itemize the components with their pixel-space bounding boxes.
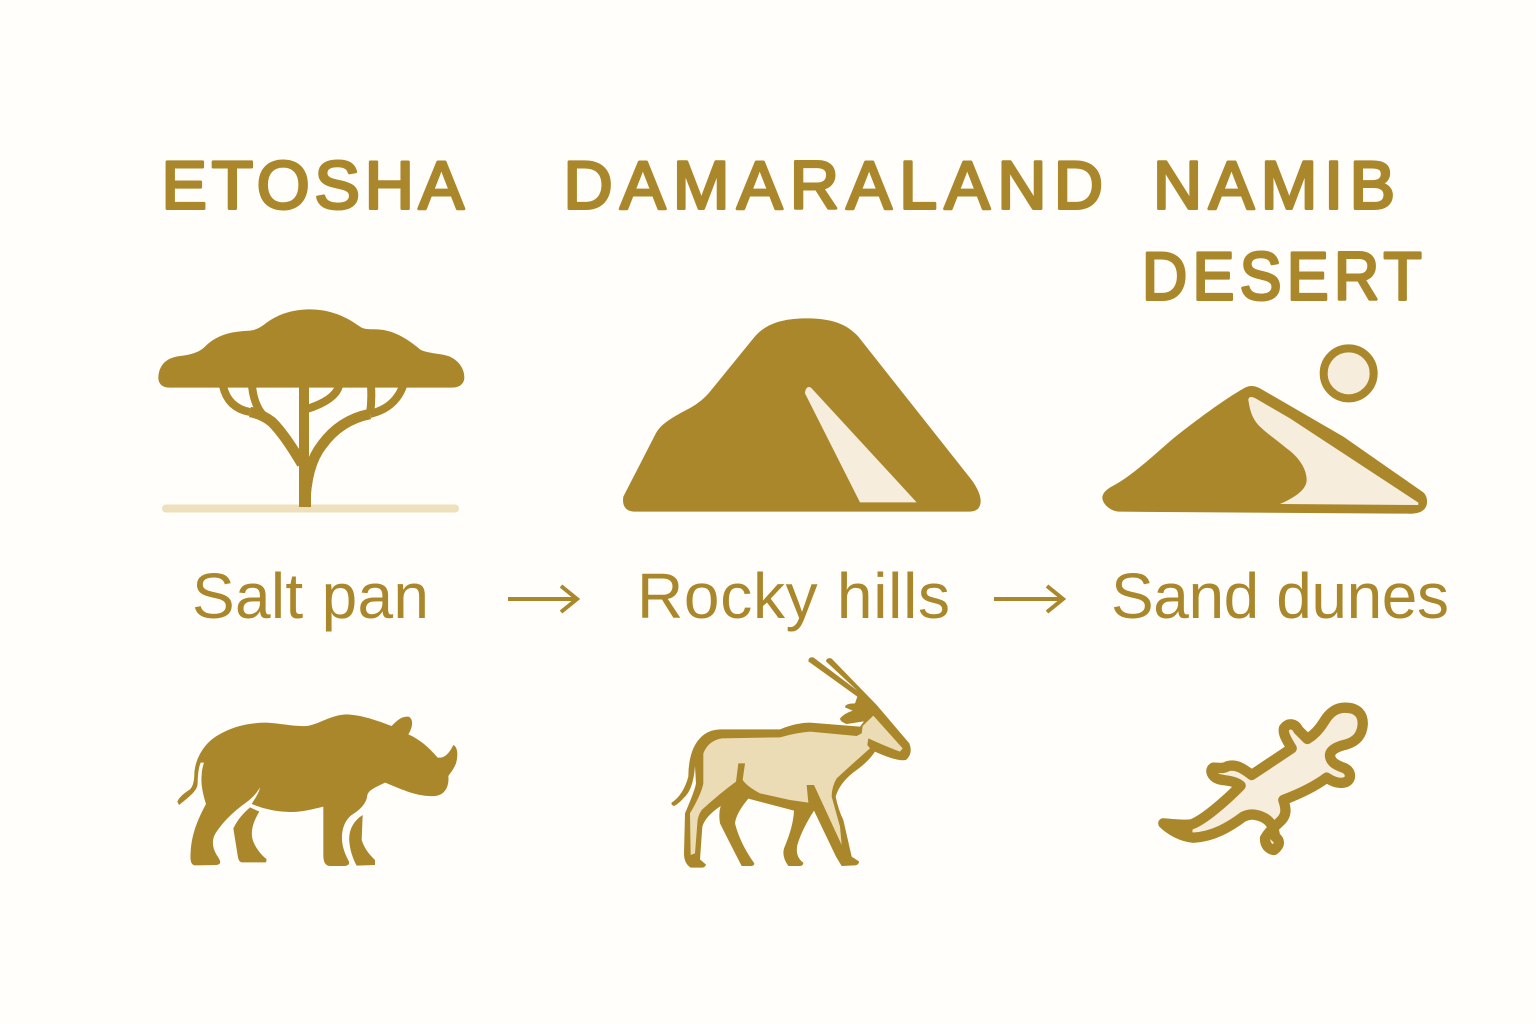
heading: Etosha: ETOSHA — [162, 148, 465, 224]
heading: Namib Desert — [1142, 148, 1422, 314]
icon: lizard — [1159, 708, 1363, 850]
icon: dune and sun — [1102, 348, 1427, 514]
panel: Damaraland — [564, 148, 1103, 868]
panel: Namib Desert — [1102, 148, 1449, 850]
label: Sand dunes: Sand dunes — [1111, 560, 1449, 632]
heading: Namib Desert: DESERT — [1142, 238, 1422, 314]
arrow: Etosha to Damaraland — [508, 586, 577, 612]
label: Rocky hills: Rocky hills — [637, 560, 950, 632]
arrow: Damaraland to Namib Desert — [994, 586, 1063, 612]
icon: rhino — [177, 714, 457, 866]
icon: acacia tree — [158, 309, 464, 512]
heading: Damaraland: DAMARALAND — [564, 148, 1103, 224]
label: Salt pan: Salt pan — [192, 560, 429, 632]
panel: Etosha — [158, 148, 465, 866]
heading: Namib Desert: NAMIB — [1153, 148, 1395, 224]
icon: oryx — [671, 657, 911, 868]
icon: rocky hill — [623, 318, 981, 512]
